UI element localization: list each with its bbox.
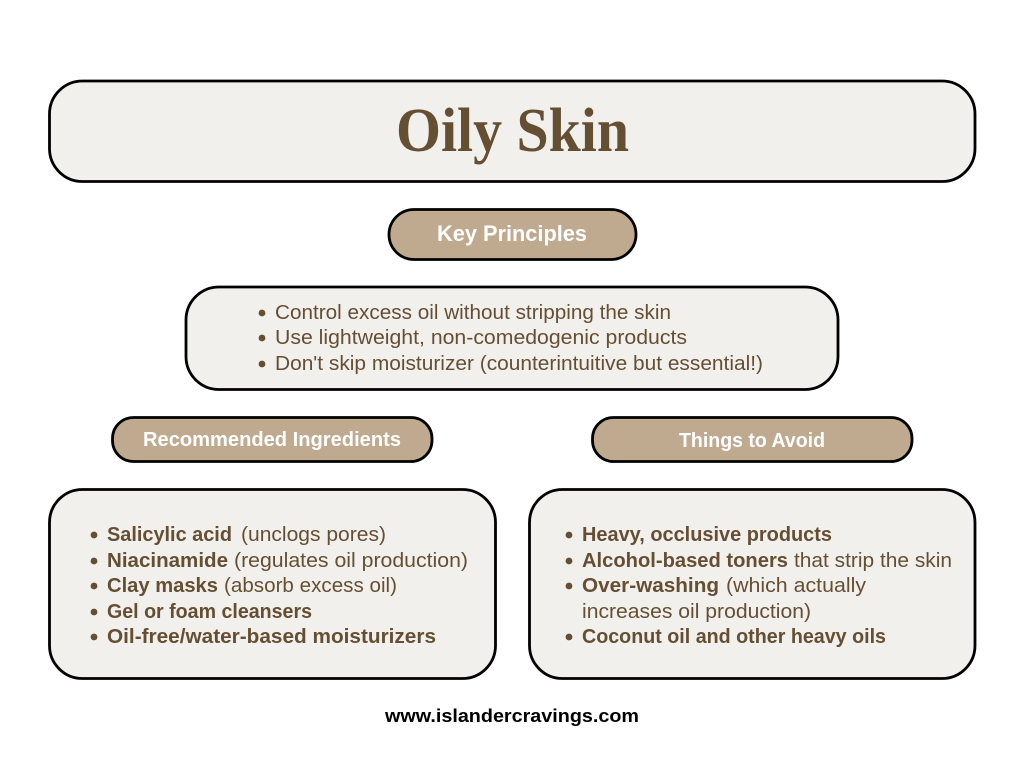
bullet list: principles: Use lightweight, non-comedogenic products bbox=[275, 326, 687, 349]
bullet list: ingredients: Salicylic acid bbox=[107, 523, 232, 546]
panel: key principles bbox=[186, 287, 838, 390]
bullet list: avoid: Heavy, occlusive products bbox=[582, 523, 832, 546]
header: Key Principles: Key Principles bbox=[437, 221, 587, 246]
bullet list: avoid: that strip the skin bbox=[794, 549, 952, 572]
header: Recommended Ingredients bbox=[112, 418, 432, 462]
panel: things to avoid bbox=[530, 490, 975, 678]
bullet list: principles: Control excess oil without stripping the skin bbox=[275, 301, 671, 324]
bullet list: avoid: increases oil production) bbox=[582, 600, 811, 623]
bullet list: principles bbox=[259, 301, 763, 375]
bullet list: ingredients: (absorb excess oil) bbox=[224, 574, 397, 597]
bullet list: ingredients: Niacinamide bbox=[107, 549, 228, 572]
bullet list: avoid: Alcohol-based toners bbox=[582, 549, 788, 572]
header: Key Principles bbox=[389, 210, 636, 260]
panel: recommended ingredients bbox=[50, 490, 496, 678]
header: Things to Avoid bbox=[592, 418, 912, 462]
header: Recommended Ingredients: Recommended Ingredients bbox=[143, 429, 401, 451]
heading: Oily Skin: Oily Skin bbox=[396, 97, 629, 165]
footer: website: www.islandercravings.com bbox=[384, 706, 639, 726]
bullet list: avoid: Over-washing bbox=[582, 574, 719, 597]
bullet list: ingredients: Oil-free/water-based moisturizers bbox=[107, 625, 436, 648]
bullet list: ingredients: Clay masks bbox=[107, 574, 218, 597]
bullet list: avoid: Coconut oil and other heavy oils bbox=[582, 625, 886, 648]
title banner bbox=[50, 81, 975, 182]
bullet list: principles: Don't skip moisturizer (counterintuitive but essential!) bbox=[275, 352, 763, 375]
bullet list: ingredients: Gel or foam cleansers bbox=[107, 600, 312, 623]
header: Things to Avoid: Things to Avoid bbox=[679, 430, 825, 452]
bullet list: ingredients: (regulates oil production) bbox=[234, 549, 468, 572]
bullet list: ingredients: (unclogs pores) bbox=[241, 523, 386, 546]
bullet list: avoid bbox=[566, 523, 952, 648]
bullet list: avoid: (which actually bbox=[726, 574, 867, 597]
bullet list: ingredients bbox=[91, 523, 468, 648]
